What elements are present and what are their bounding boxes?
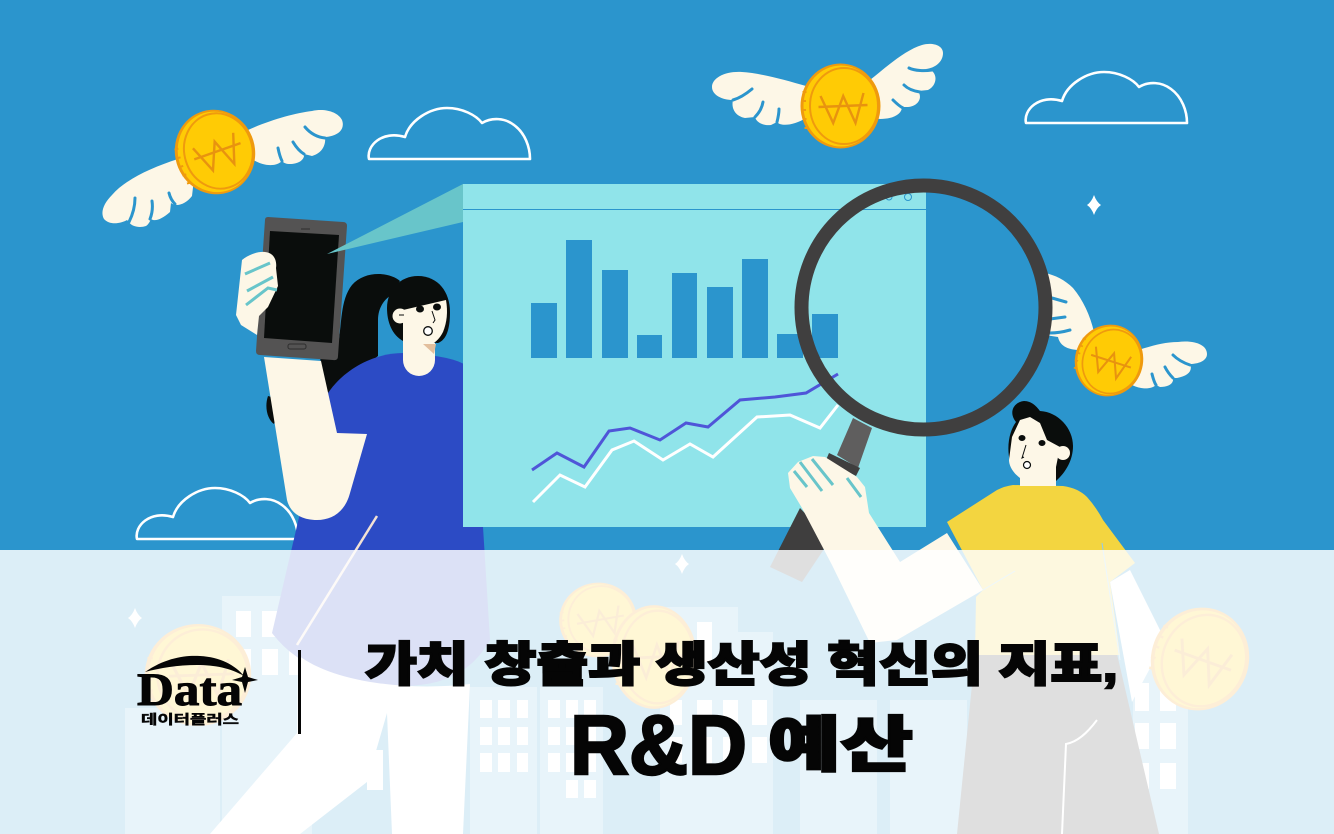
woman: shirt seam	[297, 516, 377, 645]
cloud: lower left	[137, 488, 298, 539]
panel: title bar line	[463, 208, 926, 210]
title line 2: R&D	[570, 698, 747, 792]
city buildings	[125, 596, 1188, 834]
magnifier: collar	[826, 453, 860, 476]
logo: star	[232, 667, 258, 693]
logo: wordmark: Data	[137, 664, 242, 716]
woman: raised arm	[264, 357, 367, 520]
divider	[298, 650, 301, 734]
woman: hand	[236, 252, 278, 335]
flying coin: right	[1045, 273, 1207, 406]
coin	[164, 100, 266, 204]
faint coin on the right	[1135, 593, 1265, 725]
left wing	[712, 72, 806, 125]
sparkle: lower left	[128, 608, 142, 628]
translucent bottom band	[0, 550, 1334, 834]
chart panel	[463, 184, 926, 527]
magnifier: lower handle	[770, 508, 830, 582]
flying coin: left	[102, 100, 343, 227]
logo: swoosh	[145, 656, 244, 676]
woman: head	[387, 276, 450, 376]
speech wedge from phone to panel	[327, 184, 463, 254]
man: shirt seams	[983, 543, 1120, 660]
woman: white pants	[210, 655, 470, 834]
line chart: white series	[533, 405, 838, 502]
man: yellow shirt	[947, 485, 1135, 655]
right wing	[248, 110, 343, 165]
line chart: purple series	[532, 374, 838, 470]
man: grey pants	[957, 654, 1159, 834]
right wing	[1132, 342, 1207, 388]
flying coin: top	[712, 44, 943, 148]
magnifying glass	[770, 186, 1046, 582]
man: right arm	[1110, 570, 1165, 702]
phone	[256, 217, 347, 360]
logo: Korean name: 데이터플러스	[141, 712, 239, 727]
coin	[800, 64, 880, 148]
panel: window buttons	[886, 194, 912, 200]
panel: background	[463, 184, 926, 527]
cloud: top centre-left	[369, 108, 530, 159]
logo: Data Plus	[137, 656, 258, 727]
coin	[1065, 315, 1153, 406]
right wing	[870, 44, 943, 119]
sparkle: centre	[675, 554, 689, 574]
magnifier: ring	[802, 186, 1046, 430]
bar chart	[531, 240, 838, 358]
man: head	[1008, 401, 1073, 486]
magnifier: upper handle	[837, 418, 872, 468]
woman: blue shirt	[272, 353, 490, 686]
left wing	[102, 159, 195, 227]
title line 1: 가치 창출과 생산성 혁신의 지표,	[365, 638, 1118, 691]
sparkle: upper right	[1087, 195, 1101, 215]
man: pants seam highlight	[1062, 720, 1097, 834]
title line 2	[570, 698, 913, 792]
man: holding arm and hand	[788, 456, 983, 643]
title line 2: 예산	[768, 712, 913, 779]
woman: ponytail	[266, 274, 400, 424]
upper wing	[1045, 273, 1094, 350]
faint bottom coins	[145, 578, 697, 726]
cloud: top right	[1026, 72, 1187, 123]
